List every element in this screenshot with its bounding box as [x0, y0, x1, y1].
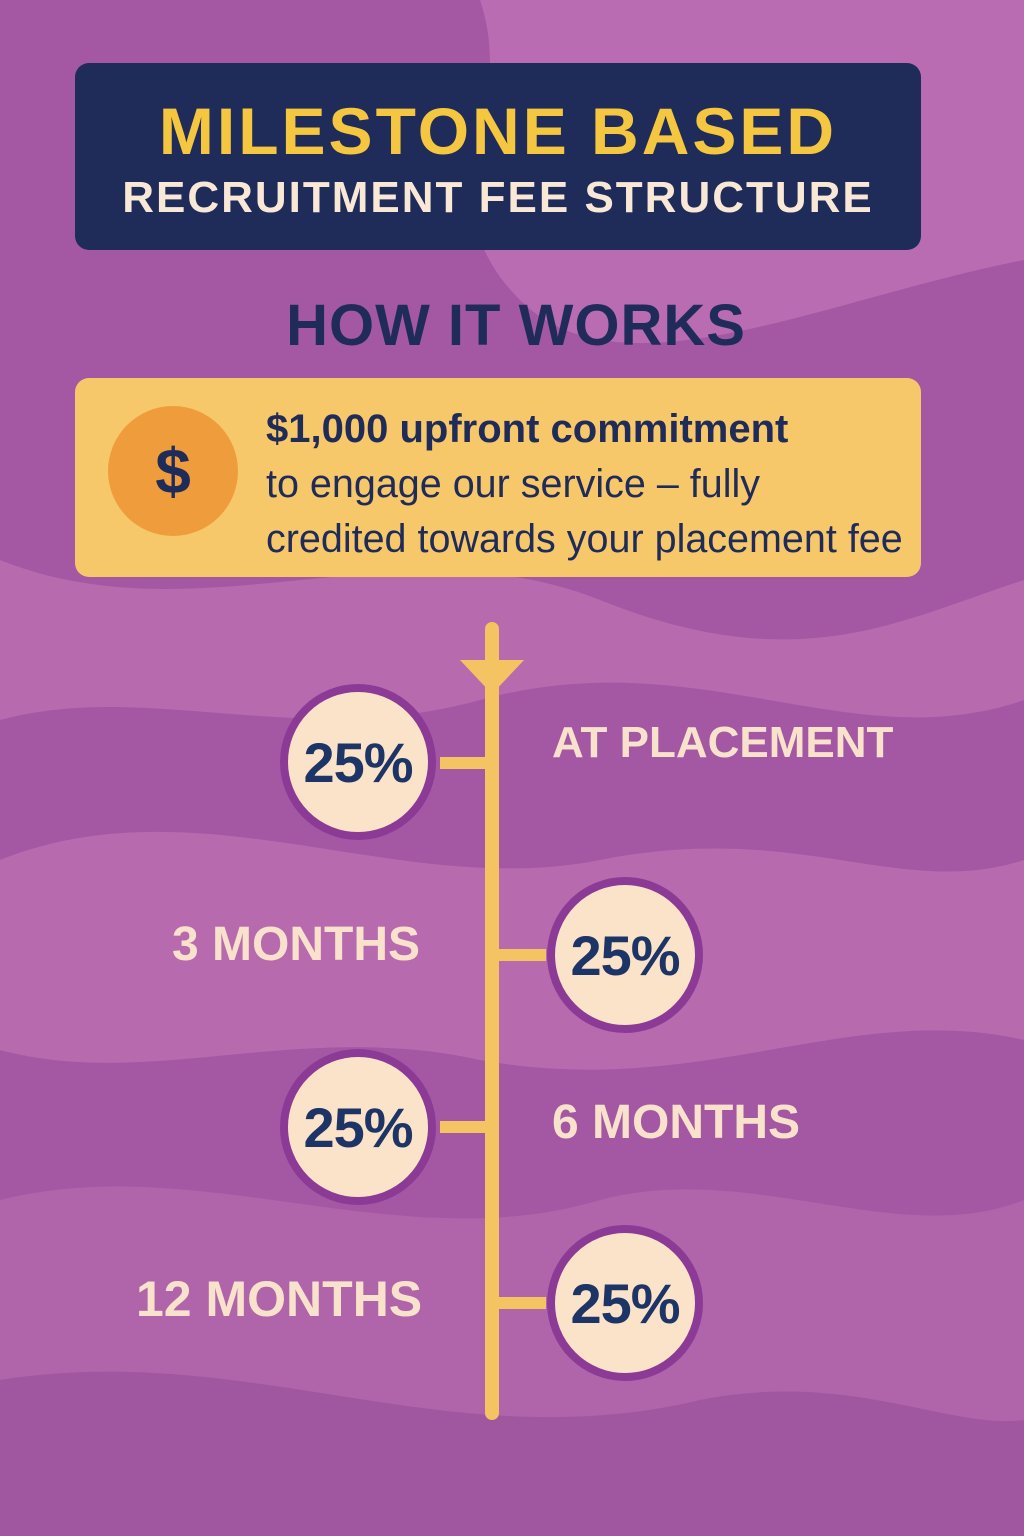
text block: to engage our service – fully — [266, 462, 760, 506]
milestone: 3 months — [547, 877, 703, 1033]
milestone: 6 months: 25% — [303, 1096, 413, 1158]
text block: credited towards your placement fee — [266, 517, 903, 561]
title — [75, 63, 921, 250]
milestone: at placement: 25% — [303, 730, 413, 794]
timeline line — [485, 622, 499, 1420]
milestone: 3 months: 25% — [570, 924, 680, 986]
panel: upfront commitment — [75, 378, 921, 577]
icon: dollar coin — [108, 406, 238, 536]
title: MILESTONE BASED — [159, 94, 837, 168]
arrow — [460, 660, 524, 686]
milestone: 6 months — [280, 1049, 436, 1205]
text block — [266, 407, 903, 561]
icon: dollar coin: $ — [155, 435, 191, 507]
title: RECRUITMENT FEE STRUCTURE — [122, 173, 874, 222]
timeline: 12 MONTHS — [136, 1271, 422, 1327]
milestone: at placement — [280, 684, 436, 840]
text block: $1,000 upfront commitment — [266, 407, 788, 451]
timeline: 3 MONTHS — [172, 918, 420, 971]
milestone: 12 months — [547, 1225, 703, 1381]
timeline: AT PLACEMENT — [552, 718, 893, 767]
timeline: 6 MONTHS — [552, 1096, 800, 1149]
heading: how it works: HOW IT WORKS — [286, 293, 746, 358]
milestone: 12 months: 25% — [570, 1272, 680, 1334]
